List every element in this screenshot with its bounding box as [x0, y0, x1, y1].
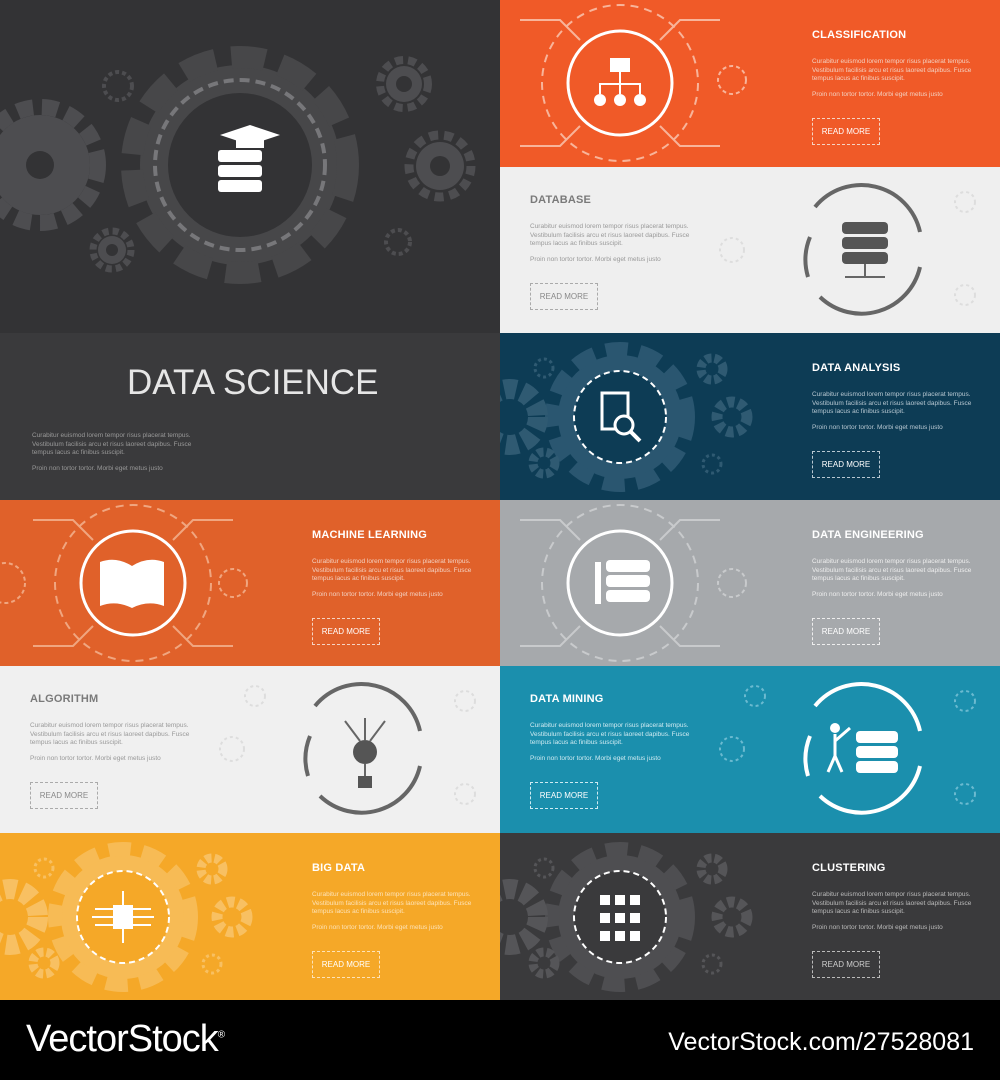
text: classification: Curabitur euismod lorem tempor risus placerat tempus. Vestibulum facilisis arcu et risus laoreet dapibus. Fusce tempus lacus ac finibus suscipit.: [812, 58, 971, 82]
title: DATA SCIENCE: [127, 363, 379, 402]
text: data mining: Proin non tortor tortor. Morbi eget metus justo: [530, 754, 661, 762]
text: database: Proin non tortor tortor. Morbi eget metus justo: [530, 256, 661, 262]
text: clustering: Curabitur euismod lorem tempor risus placerat tempus. Vestibulum facilisis arcu et risus laoreet dapibus. Fusce tempus lacus ac finibus suscipit.: [812, 891, 971, 915]
text: data mining: [530, 693, 690, 809]
panel: data engineering: [500, 500, 1000, 667]
text: big data: BIG DATA: [312, 862, 365, 874]
icon: big data gear: [0, 849, 247, 985]
text: big data: Proin non tortor tortor. Morbi eget metus justo: [312, 924, 443, 930]
icon: mining cycle: [720, 684, 975, 813]
panel: database: [500, 167, 1000, 334]
panel: big data: [0, 833, 500, 1000]
text: algorithm: ALGORITHM: [30, 693, 98, 705]
panel: data science title: [0, 333, 500, 500]
icon: book brain: [0, 505, 247, 661]
text: algorithm: [30, 693, 190, 809]
text: data mining: READ MORE: [540, 791, 588, 800]
footer: brand: VectorStock®: [26, 1018, 224, 1060]
panel: classification: [500, 0, 1000, 167]
text block: [32, 432, 192, 472]
text: big data: READ MORE: [322, 960, 370, 969]
text: classification: Proin non tortor tortor. Morbi eget metus justo: [812, 90, 943, 98]
text: data engineering: [812, 529, 972, 645]
text: database: Curabitur euismod lorem tempor risus placerat tempus. Vestibulum facilisis arcu et risus laoreet dapibus. Fusce tempus lacus ac finibus suscipit.: [530, 223, 689, 247]
text: data mining: Curabitur euismod lorem tempor risus placerat tempus. Vestibulum facilisis arcu et risus laoreet dapibus. Fusce tempus lacus ac finibus suscipit.: [530, 722, 689, 746]
text: machine learning: MACHINE LEARNING: [312, 529, 427, 541]
text: data analysis: READ MORE: [822, 460, 870, 469]
text: data analysis: Proin non tortor tortor. Morbi eget metus justo: [812, 424, 943, 430]
icon: clustering gear: [482, 849, 747, 985]
text: algorithm: READ MORE: [40, 791, 88, 800]
text: database: DATABASE: [530, 194, 591, 206]
text: data analysis: Curabitur euismod lorem tempor risus placerat tempus. Vestibulum facilisis arcu et risus laoreet dapibus. Fusce tempus lacus ac finibus suscipit.: [812, 391, 971, 415]
panel: machine learning: [0, 500, 500, 667]
panel: algorithm: [0, 666, 500, 833]
panel: clustering: [500, 833, 1000, 1000]
text: clustering: [812, 862, 972, 978]
text: data engineering: Curabitur euismod lorem tempor risus placerat tempus. Vestibulum facilisis arcu et risus laoreet dapibus. Fusce tempus lacus ac finibus suscipit.: [812, 558, 971, 582]
text: machine learning: Curabitur euismod lorem tempor risus placerat tempus. Vestibulum facilisis arcu et risus laoreet dapibus. Fusce tempus lacus ac finibus suscipit.: [312, 558, 471, 582]
text: database: [530, 194, 690, 310]
panel: data mining: [500, 666, 1000, 833]
text: data analysis: DATA ANALYSIS: [812, 362, 900, 374]
text: big data: [312, 862, 472, 978]
text block: Proin non tortor tortor. Morbi eget metus justo: [32, 464, 163, 472]
text: clustering: Proin non tortor tortor. Morbi eget metus justo: [812, 924, 943, 930]
icon: algorithm cycle: [220, 684, 475, 813]
text: machine learning: READ MORE: [322, 627, 370, 636]
icon: small gears: [0, 66, 464, 264]
panel: data science hero: [0, 0, 500, 333]
text: machine learning: [312, 529, 472, 645]
text: data engineering: Proin non tortor tortor. Morbi eget metus justo: [812, 590, 943, 598]
text: machine learning: Proin non tortor tortor. Morbi eget metus justo: [312, 590, 443, 598]
icon: large gear: [132, 57, 348, 273]
icon: circuit circle: [520, 5, 746, 161]
text: clustering: READ MORE: [822, 960, 870, 969]
text block: Curabitur euismod lorem tempor risus placerat tempus. Vestibulum facilisis arcu et risus laoreet dapibus. Fusce tempus lacus ac finibus suscipit.: [32, 432, 191, 456]
text: big data: Curabitur euismod lorem tempor risus placerat tempus. Vestibulum facilisis arcu et risus laoreet dapibus. Fusce tempus lacus ac finibus suscipit.: [312, 891, 471, 915]
text: clustering: CLUSTERING: [812, 862, 886, 874]
icon: gear magnifier: [482, 349, 747, 485]
text: classification: CLASSIFICATION: [812, 29, 906, 41]
icon: wrench database: [520, 505, 746, 661]
text: data analysis: [812, 362, 972, 478]
text: algorithm: Curabitur euismod lorem tempor risus placerat tempus. Vestibulum facilisis arcu et risus laoreet dapibus. Fusce tempus lacus ac finibus suscipit.: [30, 722, 189, 746]
panel: data analysis: [500, 333, 1000, 500]
text: classification: [812, 29, 972, 145]
text: classification: READ MORE: [822, 127, 870, 136]
text: database: READ MORE: [540, 292, 588, 301]
text: algorithm: Proin non tortor tortor. Morbi eget metus justo: [30, 754, 161, 762]
icon: database cycle: [720, 185, 975, 314]
text: data engineering: READ MORE: [822, 627, 870, 636]
text: data engineering: DATA ENGINEERING: [812, 529, 924, 541]
footer: url: VectorStock.com/27528081: [668, 1028, 974, 1056]
text: data mining: DATA MINING: [530, 693, 604, 705]
footer: [0, 1000, 1000, 1080]
